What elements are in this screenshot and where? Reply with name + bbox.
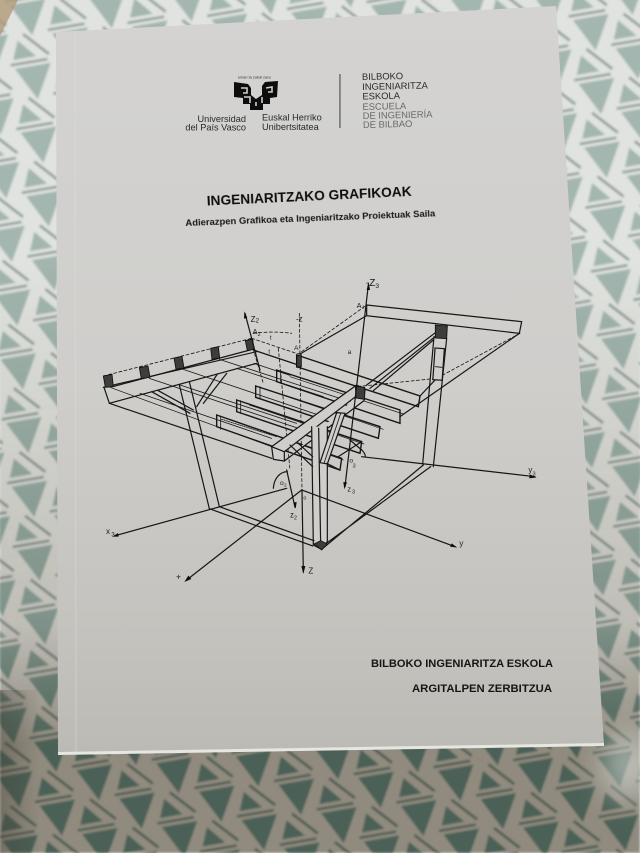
axis labels: a — [348, 349, 352, 356]
axis labels: o — [349, 458, 353, 465]
post braces — [290, 413, 362, 470]
text: Basque school name: INGENIARITZA — [362, 79, 429, 92]
axis arrowheads — [113, 282, 537, 582]
text: Spanish school name: DE BILBAO — [363, 118, 412, 130]
axis labels: 2 — [284, 483, 287, 488]
axis labels: -Z — [366, 278, 375, 289]
axis labels: Z — [251, 315, 256, 324]
school name block — [339, 69, 434, 130]
text: Basque school name: ESKOLA — [362, 90, 401, 101]
axis labels: Z — [308, 566, 313, 575]
axis labels: y — [528, 466, 532, 475]
text: Euskal Herriko Unibertsitatea: Euskal Herriko — [262, 112, 322, 122]
university logo block — [185, 76, 322, 132]
axis lines — [115, 285, 535, 580]
publisher line: school: BILBOKO INGENIARITZA ESKOLA — [371, 658, 553, 670]
subtitle: Adierazpen Grafikoa eta Ingeniaritzako Proiektuak Saila — [185, 208, 435, 228]
axis labels: t — [268, 349, 270, 355]
hatched section squares — [103, 325, 447, 550]
axis labels: A — [294, 345, 299, 352]
text: Euskal Herriko Unibertsitatea — [262, 112, 322, 132]
axis labels: o — [303, 495, 306, 501]
text: Euskal Herriko Unibertsitatea: Unibertsitatea — [262, 122, 320, 132]
axis labels: 1 — [362, 305, 365, 310]
rear right post — [423, 337, 447, 467]
axis labels: z — [290, 510, 294, 519]
axis labels: 2 — [258, 332, 261, 338]
axis labels: 3 — [533, 471, 536, 477]
title: INGENIARITZAKO GRAFIKOAK — [206, 184, 412, 208]
axis labels: t — [270, 335, 272, 341]
axis labels: y — [459, 539, 463, 548]
text: Universidad del País Vasco: Universidad — [197, 114, 246, 124]
roof outline — [103, 350, 350, 458]
text: Spanish school name — [362, 99, 434, 130]
axis labels: A — [357, 301, 362, 310]
ground frame — [209, 465, 431, 549]
axis labels: A — [253, 327, 258, 336]
joists — [217, 355, 420, 470]
axis labels: z — [347, 485, 351, 494]
axis labels: 3 — [111, 533, 115, 539]
text: Universidad del País Vasco — [185, 114, 246, 132]
left post and braces — [152, 373, 227, 509]
front tie beam — [272, 385, 365, 461]
axis labels: 2 — [256, 319, 260, 325]
front post — [312, 427, 327, 549]
axis labels: -z — [296, 315, 303, 324]
text: Basque school name — [362, 69, 429, 101]
text: Universidad del País Vasco: del País Vasco — [185, 122, 246, 132]
axis labels: o — [280, 480, 284, 487]
technical drawing: timber pergola with axes — [103, 278, 537, 582]
axis labels — [106, 278, 536, 581]
publisher line: service: ARGITALPEN ZERBITZUA — [412, 683, 552, 695]
rear long beam — [300, 305, 522, 417]
dashed construction lines — [103, 305, 520, 490]
axis labels: 3 — [352, 489, 355, 495]
text: Spanish school name: DE INGENIERÍA — [363, 108, 433, 121]
icon: university emblem: eman ta zabal zazu — [238, 76, 271, 80]
axis labels: 3 — [353, 463, 356, 469]
axis labels: 2 — [294, 515, 297, 521]
axis labels: 3 — [375, 283, 379, 290]
text: Basque school name: BILBOKO — [362, 70, 403, 82]
axis labels: + — [176, 571, 181, 581]
axis labels: x — [106, 527, 110, 536]
book cover — [56, 6, 604, 755]
text: Spanish school name: ESCUELA — [362, 100, 407, 112]
